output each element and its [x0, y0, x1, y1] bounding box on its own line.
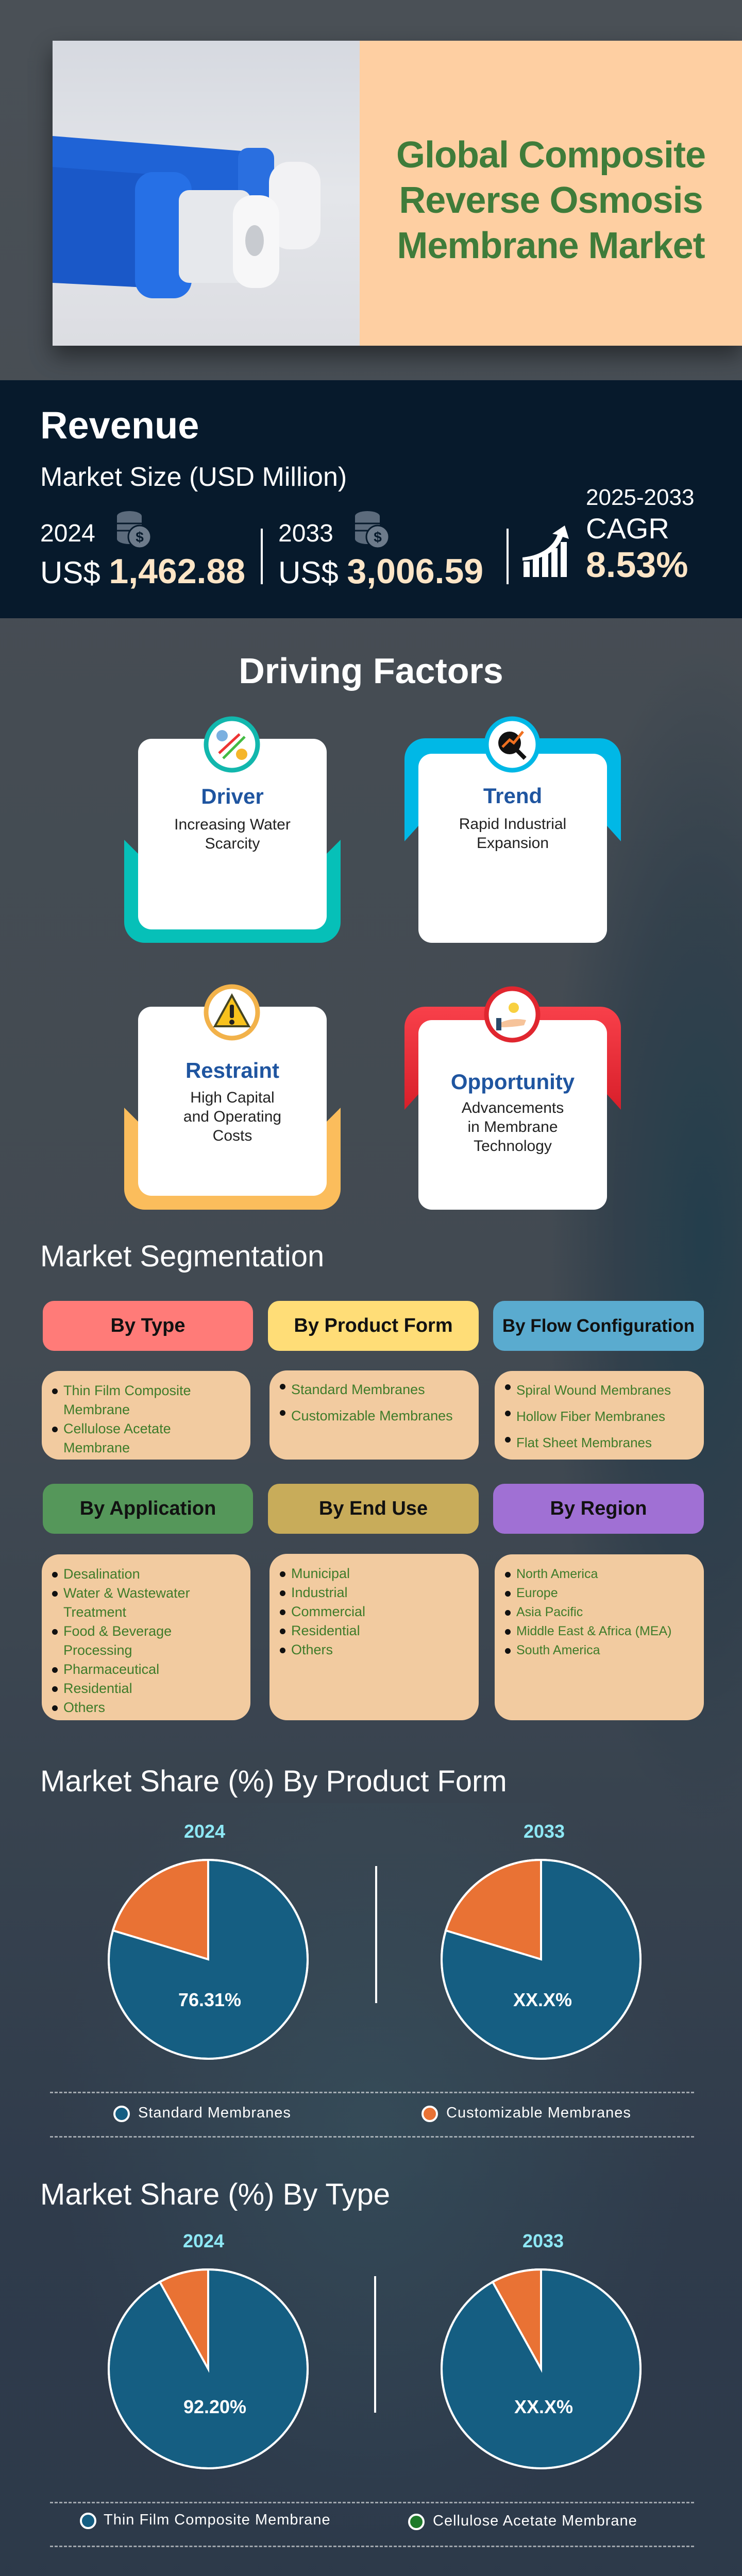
- panel: trend: Expansion: [477, 835, 549, 852]
- text: Asia Pacific: [516, 1605, 583, 1619]
- text: Commercial: [291, 1604, 365, 1619]
- heading: market share by product form: Market Share (%) By Product Form: [40, 1765, 507, 1798]
- heading: driving factors: Driving Factors: [239, 651, 503, 691]
- text: Water & Wastewater: [63, 1585, 190, 1601]
- icon: driver: [204, 716, 260, 773]
- panel: trend: Rapid Industrial: [459, 816, 566, 833]
- legend: type: Thin Film Composite Membrane: [104, 2512, 331, 2528]
- panel: restraint: Costs: [213, 1127, 252, 1144]
- panel: driver: Increasing Water: [174, 816, 291, 833]
- panel: driver: Scarcity: [205, 835, 260, 852]
- icon: trend: [484, 716, 540, 773]
- pie chart: type: XX.X%: [514, 2396, 573, 2417]
- title text: Membrane Market: [397, 225, 705, 266]
- text: Food & Beverage: [63, 1623, 172, 1639]
- segmentation: by product form: [268, 1301, 479, 1351]
- text: Others: [291, 1642, 333, 1657]
- text: Standard Membranes: [291, 1382, 425, 1397]
- CAGR: 2025-2033: [586, 485, 694, 510]
- text: Processing: [63, 1642, 132, 1658]
- pie chart: product form: XX.X%: [513, 1989, 572, 2010]
- panel: restraint: High Capital: [190, 1089, 275, 1106]
- text: North America: [516, 1567, 598, 1581]
- panel: opportunity: [404, 986, 621, 1210]
- segmentation: by region: [493, 1484, 704, 1534]
- text: Residential: [291, 1623, 360, 1638]
- panel: trend: [404, 716, 621, 943]
- legend: type: [80, 2512, 637, 2530]
- revenue band: [0, 380, 742, 618]
- icon: coins: [355, 511, 389, 547]
- text: Industrial: [291, 1585, 348, 1600]
- icon: warning: [204, 984, 260, 1041]
- panel: driver: [124, 716, 341, 943]
- heading: market share by type: Market Share (%) By Type: [40, 2178, 390, 2211]
- text: 2033: [522, 2230, 564, 2251]
- text: Hollow Fiber Membranes: [516, 1409, 665, 1424]
- photo: RO membrane filters: [53, 41, 360, 346]
- pie chart: product form: [108, 1859, 642, 2060]
- icon: idea hand: [484, 986, 540, 1043]
- segmentation: by end use: [268, 1484, 479, 1534]
- segmentation: by flow configuration: By Flow Configuration: [502, 1316, 695, 1336]
- panel: restraint: and Operating: [183, 1108, 281, 1125]
- panel: driver: Driver: [201, 784, 264, 808]
- panel: trend: Trend: [483, 784, 542, 808]
- legend: product form: Customizable Membranes: [446, 2105, 631, 2121]
- text: 2024: [184, 1821, 225, 1842]
- segmentation: by application: [43, 1484, 253, 1534]
- text: Flat Sheet Membranes: [516, 1435, 652, 1450]
- segmentation: by type: By Type: [110, 1315, 185, 1336]
- text: Thin Film Composite: [63, 1383, 191, 1398]
- icon: coins: [117, 511, 150, 547]
- text: Others: [63, 1700, 105, 1715]
- segmentation: by end use: By End Use: [319, 1498, 428, 1519]
- title text: Global Composite: [396, 134, 705, 176]
- text: Pharmaceutical: [63, 1662, 159, 1677]
- legend: type: Cellulose Acetate Membrane: [433, 2513, 637, 2529]
- divider: [507, 529, 509, 584]
- text: Cellulose Acetate: [63, 1421, 171, 1436]
- panel: opportunity: in Membrane: [467, 1118, 558, 1136]
- text: Membrane: [63, 1440, 130, 1455]
- panel: opportunity: Advancements: [462, 1099, 564, 1116]
- panel: restraint: Restraint: [185, 1058, 279, 1082]
- 2033 value: [278, 511, 483, 591]
- text: Europe: [516, 1586, 558, 1600]
- text: Membrane: [63, 1402, 130, 1417]
- text: Municipal: [291, 1566, 350, 1581]
- text: Desalination: [63, 1566, 140, 1582]
- 2033 value: US$ 3,006.59: [278, 552, 483, 591]
- title text: Reverse Osmosis: [399, 180, 703, 221]
- CAGR: [586, 485, 694, 585]
- 2024 value: 2024: [40, 520, 95, 547]
- text: Middle East & Africa (MEA): [516, 1624, 671, 1638]
- icon: coins: $: [136, 529, 144, 545]
- panel: opportunity: Opportunity: [451, 1070, 575, 1094]
- 2024 value: US$ 1,462.88: [40, 552, 245, 591]
- segmentation: by application: By Application: [80, 1498, 216, 1519]
- segmentation: by flow configuration: [493, 1301, 704, 1351]
- divider: [261, 529, 263, 584]
- title text: [360, 41, 742, 346]
- CAGR: CAGR: [586, 512, 669, 545]
- pie chart: type: [108, 2268, 642, 2469]
- heading: market segmentation: Market Segmentation: [40, 1240, 324, 1273]
- panel: restraint: [124, 984, 341, 1210]
- text: Customizable Membranes: [291, 1408, 453, 1423]
- segmentation: by region: By Region: [550, 1498, 647, 1519]
- legend: product form: Standard Membranes: [138, 2105, 291, 2121]
- pie chart: type: 92.20%: [183, 2396, 246, 2417]
- 2033 value: 2033: [278, 520, 333, 547]
- text: 2033: [524, 1821, 565, 1842]
- revenue heading: Revenue: [40, 404, 199, 447]
- market size label: Market Size (USD Million): [40, 462, 347, 492]
- panel: opportunity: Technology: [474, 1138, 552, 1155]
- text: Treatment: [63, 1604, 126, 1620]
- title panel: [53, 41, 742, 346]
- CAGR: 8.53%: [586, 545, 688, 585]
- 2024 value: [40, 511, 245, 591]
- text: Spiral Wound Membranes: [516, 1382, 671, 1398]
- icon: growth chart: [522, 526, 569, 577]
- icon: coins: $: [374, 529, 382, 545]
- segmentation: by product form: By Product Form: [294, 1315, 453, 1336]
- text: 2024: [183, 2230, 224, 2251]
- text: Residential: [63, 1681, 132, 1696]
- text: South America: [516, 1643, 600, 1657]
- segmentation: by type: [43, 1301, 253, 1351]
- pie chart: product form: 76.31%: [178, 1989, 241, 2010]
- legend: product form: [113, 2105, 631, 2122]
